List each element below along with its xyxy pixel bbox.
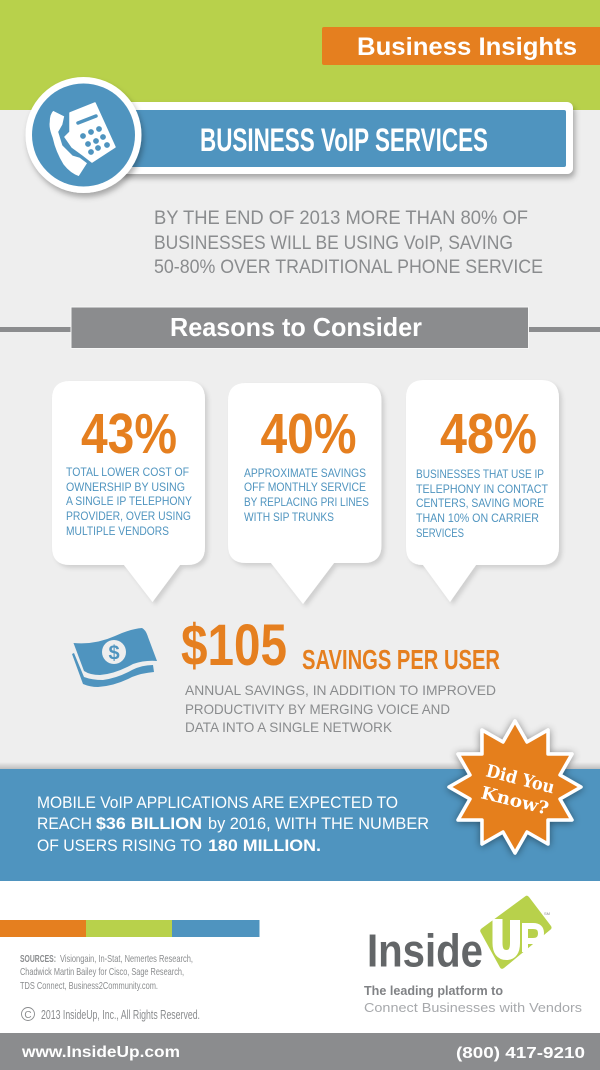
callout: 48%: SERVICES <box>416 526 464 540</box>
title banner: BUSINESS VoIP SERVICES <box>200 122 488 158</box>
callout: 48%: BUSINESSES THAT USE IP <box>416 467 544 481</box>
panel: mobile VoIP band: by 2016, WITH THE NUMBER <box>208 814 429 833</box>
callout: 43%: PROVIDER, OVER USING <box>66 509 191 523</box>
copyright line <box>22 1008 200 1022</box>
callout: 40%: WITH SIP TRUNKS <box>244 510 334 524</box>
logo tagline: The leading platform to <box>364 984 503 998</box>
badge: Did You Know starburst <box>449 721 581 853</box>
callout: 43%: TOTAL LOWER COST OF <box>66 465 189 479</box>
icon: money bills <box>72 628 157 687</box>
section heading: Reasons to Consider: Reasons to Consider <box>170 312 422 342</box>
logo: InsideUp: Inside <box>367 924 483 976</box>
panel: mobile VoIP band: OF USERS RISING TO <box>37 836 202 855</box>
callout: 43%: OWNERSHIP BY USING <box>66 480 185 494</box>
stat description: ANNUAL SAVINGS, IN ADDITION TO IMPROVED <box>185 682 496 698</box>
callout: 48%: 48% <box>440 402 537 466</box>
callout: 48% <box>406 380 559 602</box>
header green band <box>0 0 600 110</box>
stat description: PRODUCTIVITY BY MERGING VOICE AND <box>185 701 450 717</box>
logo tagline <box>364 984 582 1015</box>
callout: 40%: OFF MONTHLY SERVICE <box>244 480 366 494</box>
sources text: Visiongain, In-Stat, Nemertes Research, <box>60 953 193 965</box>
badge: Business Insights <box>322 27 600 65</box>
callout: 43%: A SINGLE IP TELEPHONY <box>66 494 192 508</box>
callout: 43%: 43% <box>81 402 177 466</box>
callout: 40%: APPROXIMATE SAVINGS <box>244 466 366 480</box>
intro text: 50-80% OVER TRADITIONAL PHONE SERVICE <box>154 257 543 278</box>
panel: mobile VoIP band: MOBILE VoIP APPLICATIONS ARE EXPECTED TO <box>37 793 398 812</box>
stat description: DATA INTO A SINGLE NETWORK <box>185 719 393 735</box>
callout: 43%: MULTIPLE VENDORS <box>66 524 169 538</box>
callout: 40% <box>228 383 382 604</box>
panel: mobile VoIP band: $36 BILLION <box>96 814 202 833</box>
footer bar <box>0 1033 600 1070</box>
logo tagline: Connect Businesses with Vendors <box>364 1001 582 1015</box>
callout: 40%: 40% <box>260 402 356 466</box>
footer white panel <box>0 881 600 1033</box>
badge: Did You Know starburst: Did You <box>484 761 557 798</box>
intro text: BY THE END OF 2013 MORE THAN 80% OF <box>154 208 528 229</box>
copyright line: C <box>24 1010 32 1021</box>
panel: mobile VoIP band <box>0 762 600 881</box>
footer bar: (800) 417-9210 <box>456 1045 585 1062</box>
badge: Business Insights: Business Insights <box>357 33 577 61</box>
callout: 40%: BY REPLACING PRI LINES <box>244 495 369 509</box>
callout: 48%: TELEPHONY IN CONTACT <box>416 482 549 496</box>
sources text <box>20 953 193 992</box>
panel: mobile VoIP band: REACH <box>37 814 92 833</box>
section heading: Reasons to Consider <box>0 307 600 348</box>
footer bar: www.InsideUp.com <box>21 1044 180 1061</box>
logo: InsideUp: SM <box>544 911 550 916</box>
stat description <box>185 682 496 735</box>
sources text: TDS Connect, Business2Community.com. <box>20 980 158 992</box>
stat: $105 savings per user: SAVINGS PER USER <box>302 644 500 675</box>
icon: money bills: $ <box>108 642 120 664</box>
sources text: SOURCES: <box>20 953 56 965</box>
icon: telephone <box>26 77 142 193</box>
callout: 48%: THAN 10% ON CARRIER <box>416 511 539 525</box>
logo: InsideUp <box>367 896 552 976</box>
callout: 48%: CENTERS, SAVING MORE <box>416 496 544 510</box>
panel: mobile VoIP band: 180 MILLION. <box>208 836 321 855</box>
title banner <box>118 102 573 174</box>
colour stripe <box>0 920 260 937</box>
intro text: BUSINESSES WILL BE USING VoIP, SAVING <box>154 233 513 254</box>
stat: $105 savings per user: $105 <box>181 613 287 678</box>
stat: $105 savings per user <box>181 613 500 678</box>
callout: 43% <box>52 381 205 602</box>
copyright line: 2013 InsideUp, Inc., All Rights Reserved. <box>41 1008 200 1022</box>
intro text <box>154 208 543 278</box>
badge: Did You Know starburst: Know? <box>479 783 551 820</box>
sources text: Chadwick Martin Bailey for Cisco, Sage Research, <box>20 966 184 978</box>
